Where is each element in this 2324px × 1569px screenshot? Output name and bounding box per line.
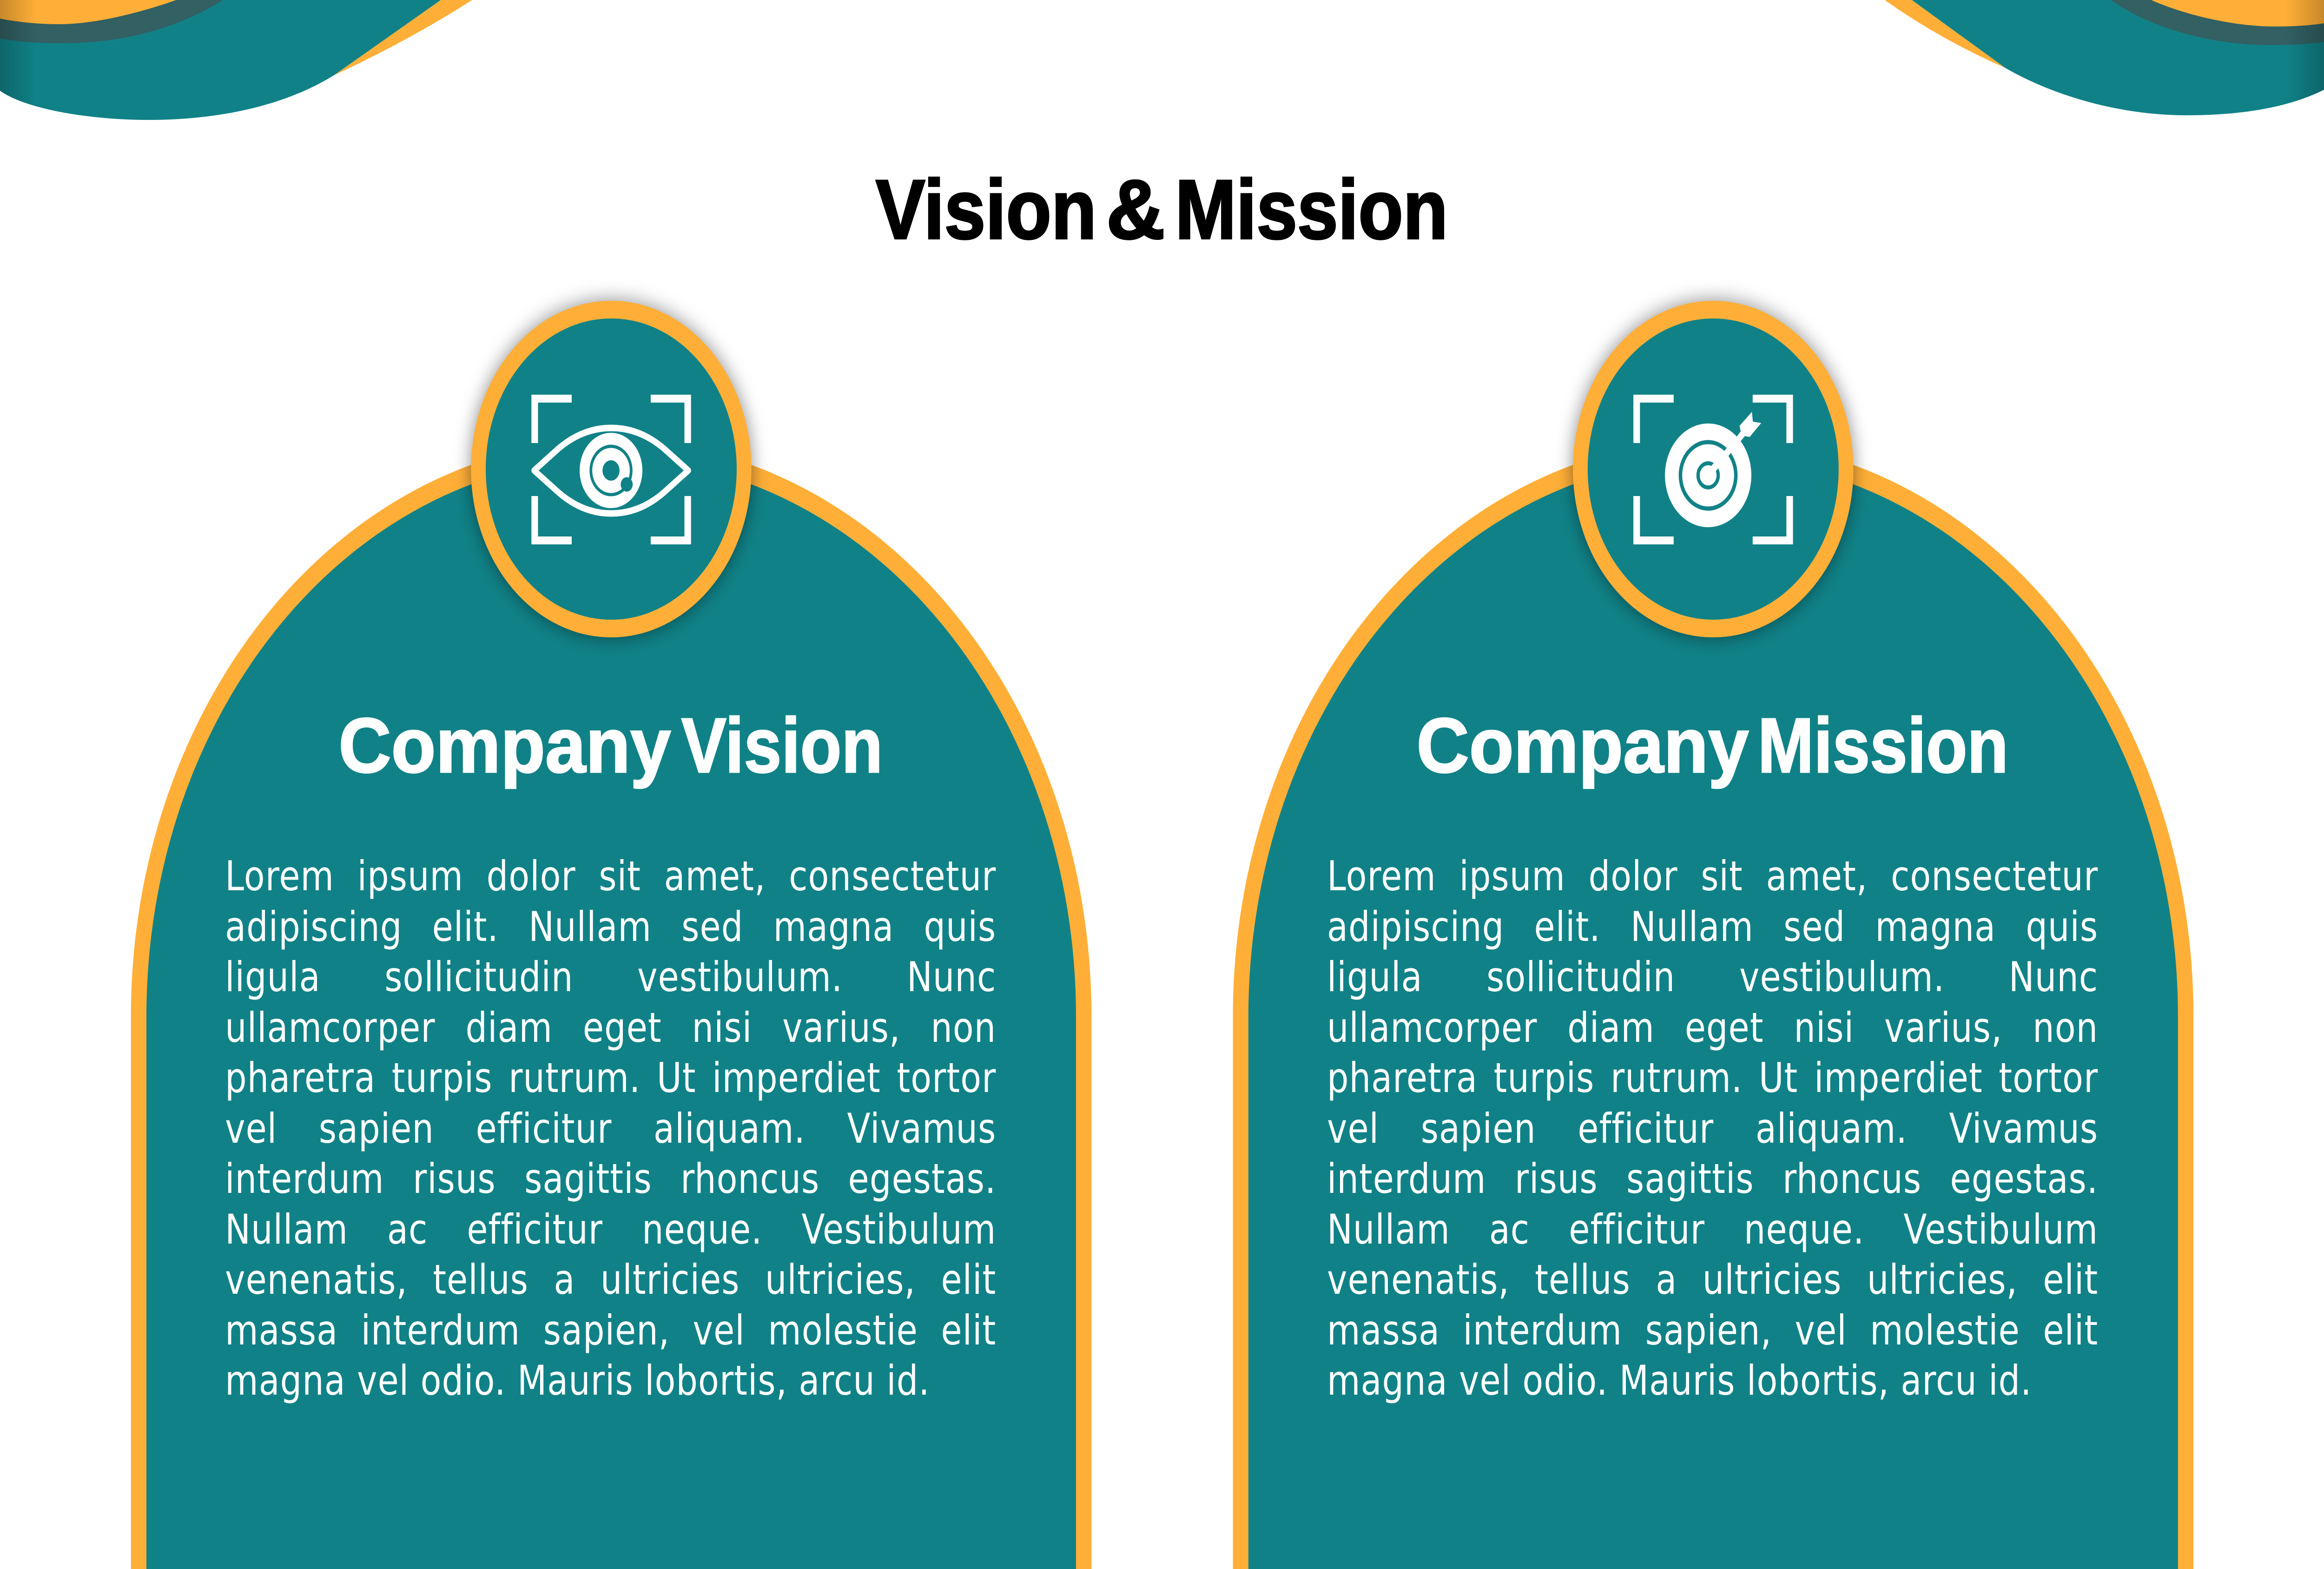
heading: company mission [1417, 702, 2008, 789]
body text: vision: magna vel odio. Mauris lobortis, arcu id. [225, 1357, 930, 1404]
body text: mission: vel sapien efficitur aliquam. Vivamus [1327, 1105, 2098, 1152]
panel: company vision [131, 301, 1091, 1569]
title [876, 163, 1448, 257]
title: & [1106, 163, 1165, 257]
body text: vision: venenatis, tellus a ultricies ultricies, elit [225, 1256, 996, 1304]
body text: mission: interdum risus sagittis rhoncus egestas. [1327, 1155, 2098, 1203]
body text: mission [1327, 851, 2098, 1409]
body text: mission: adipiscing elit. Nullam sed magna quis [1327, 903, 2098, 950]
heading: company mission: Mission [1758, 702, 2008, 789]
body text: mission: pharetra turpis rutrum. Ut imperdiet tortor [1327, 1054, 2098, 1102]
icon badge: mission target [1573, 301, 1854, 637]
body text: vision: ullamcorper diam eget nisi varius, non [225, 1003, 996, 1052]
body text: vision: Lorem ipsum dolor sit amet, consectetur [225, 852, 996, 900]
body text: vision: adipiscing elit. Nullam sed magna quis [225, 903, 996, 950]
icon: target with arrow in viewfinder brackets [1637, 399, 1789, 540]
heading: company vision [338, 702, 883, 789]
body text: mission: venenatis, tellus a ultricies ultricies, elit [1327, 1256, 2098, 1304]
body text: vision: ligula sollicitudin vestibulum. Nunc [225, 953, 996, 1001]
body text: mission: ullamcorper diam eget nisi varius, non [1327, 1003, 2098, 1052]
top-right corner wave decoration [1885, 0, 2324, 115]
body text: vision: pharetra turpis rutrum. Ut imperdiet tortor [225, 1054, 996, 1102]
body text: vision [225, 851, 996, 1409]
body text: vision: interdum risus sagittis rhoncus egestas. [225, 1155, 996, 1203]
body text: vision: massa interdum sapien, vel molestie elit [225, 1306, 996, 1354]
body text: vision: vel sapien efficitur aliquam. Vivamus [225, 1105, 996, 1152]
top-left corner wave decoration [0, 0, 472, 130]
body text: mission: ligula sollicitudin vestibulum. Nunc [1327, 953, 2098, 1001]
heading: company vision: Vision [681, 702, 883, 789]
body text: mission: Lorem ipsum dolor sit amet, consectetur [1327, 852, 2098, 900]
body text: mission: magna vel odio. Mauris lobortis, arcu id. [1327, 1357, 2032, 1404]
icon badge: vision eye [471, 301, 752, 637]
arch card [131, 440, 1091, 1569]
heading: company mission: Company [1417, 702, 1749, 789]
title: Mission [1175, 163, 1448, 257]
body text: vision: Nullam ac efficitur neque. Vestibulum [225, 1205, 996, 1253]
panel: company mission [1233, 301, 2193, 1569]
body text: mission: massa interdum sapien, vel molestie elit [1327, 1306, 2098, 1354]
body text: mission: Nullam ac efficitur neque. Vestibulum [1327, 1205, 2098, 1253]
heading: company vision: Company [338, 702, 671, 789]
arch card [1233, 440, 2193, 1569]
title: Vision [876, 163, 1096, 257]
icon: eye in viewfinder brackets [534, 399, 688, 540]
